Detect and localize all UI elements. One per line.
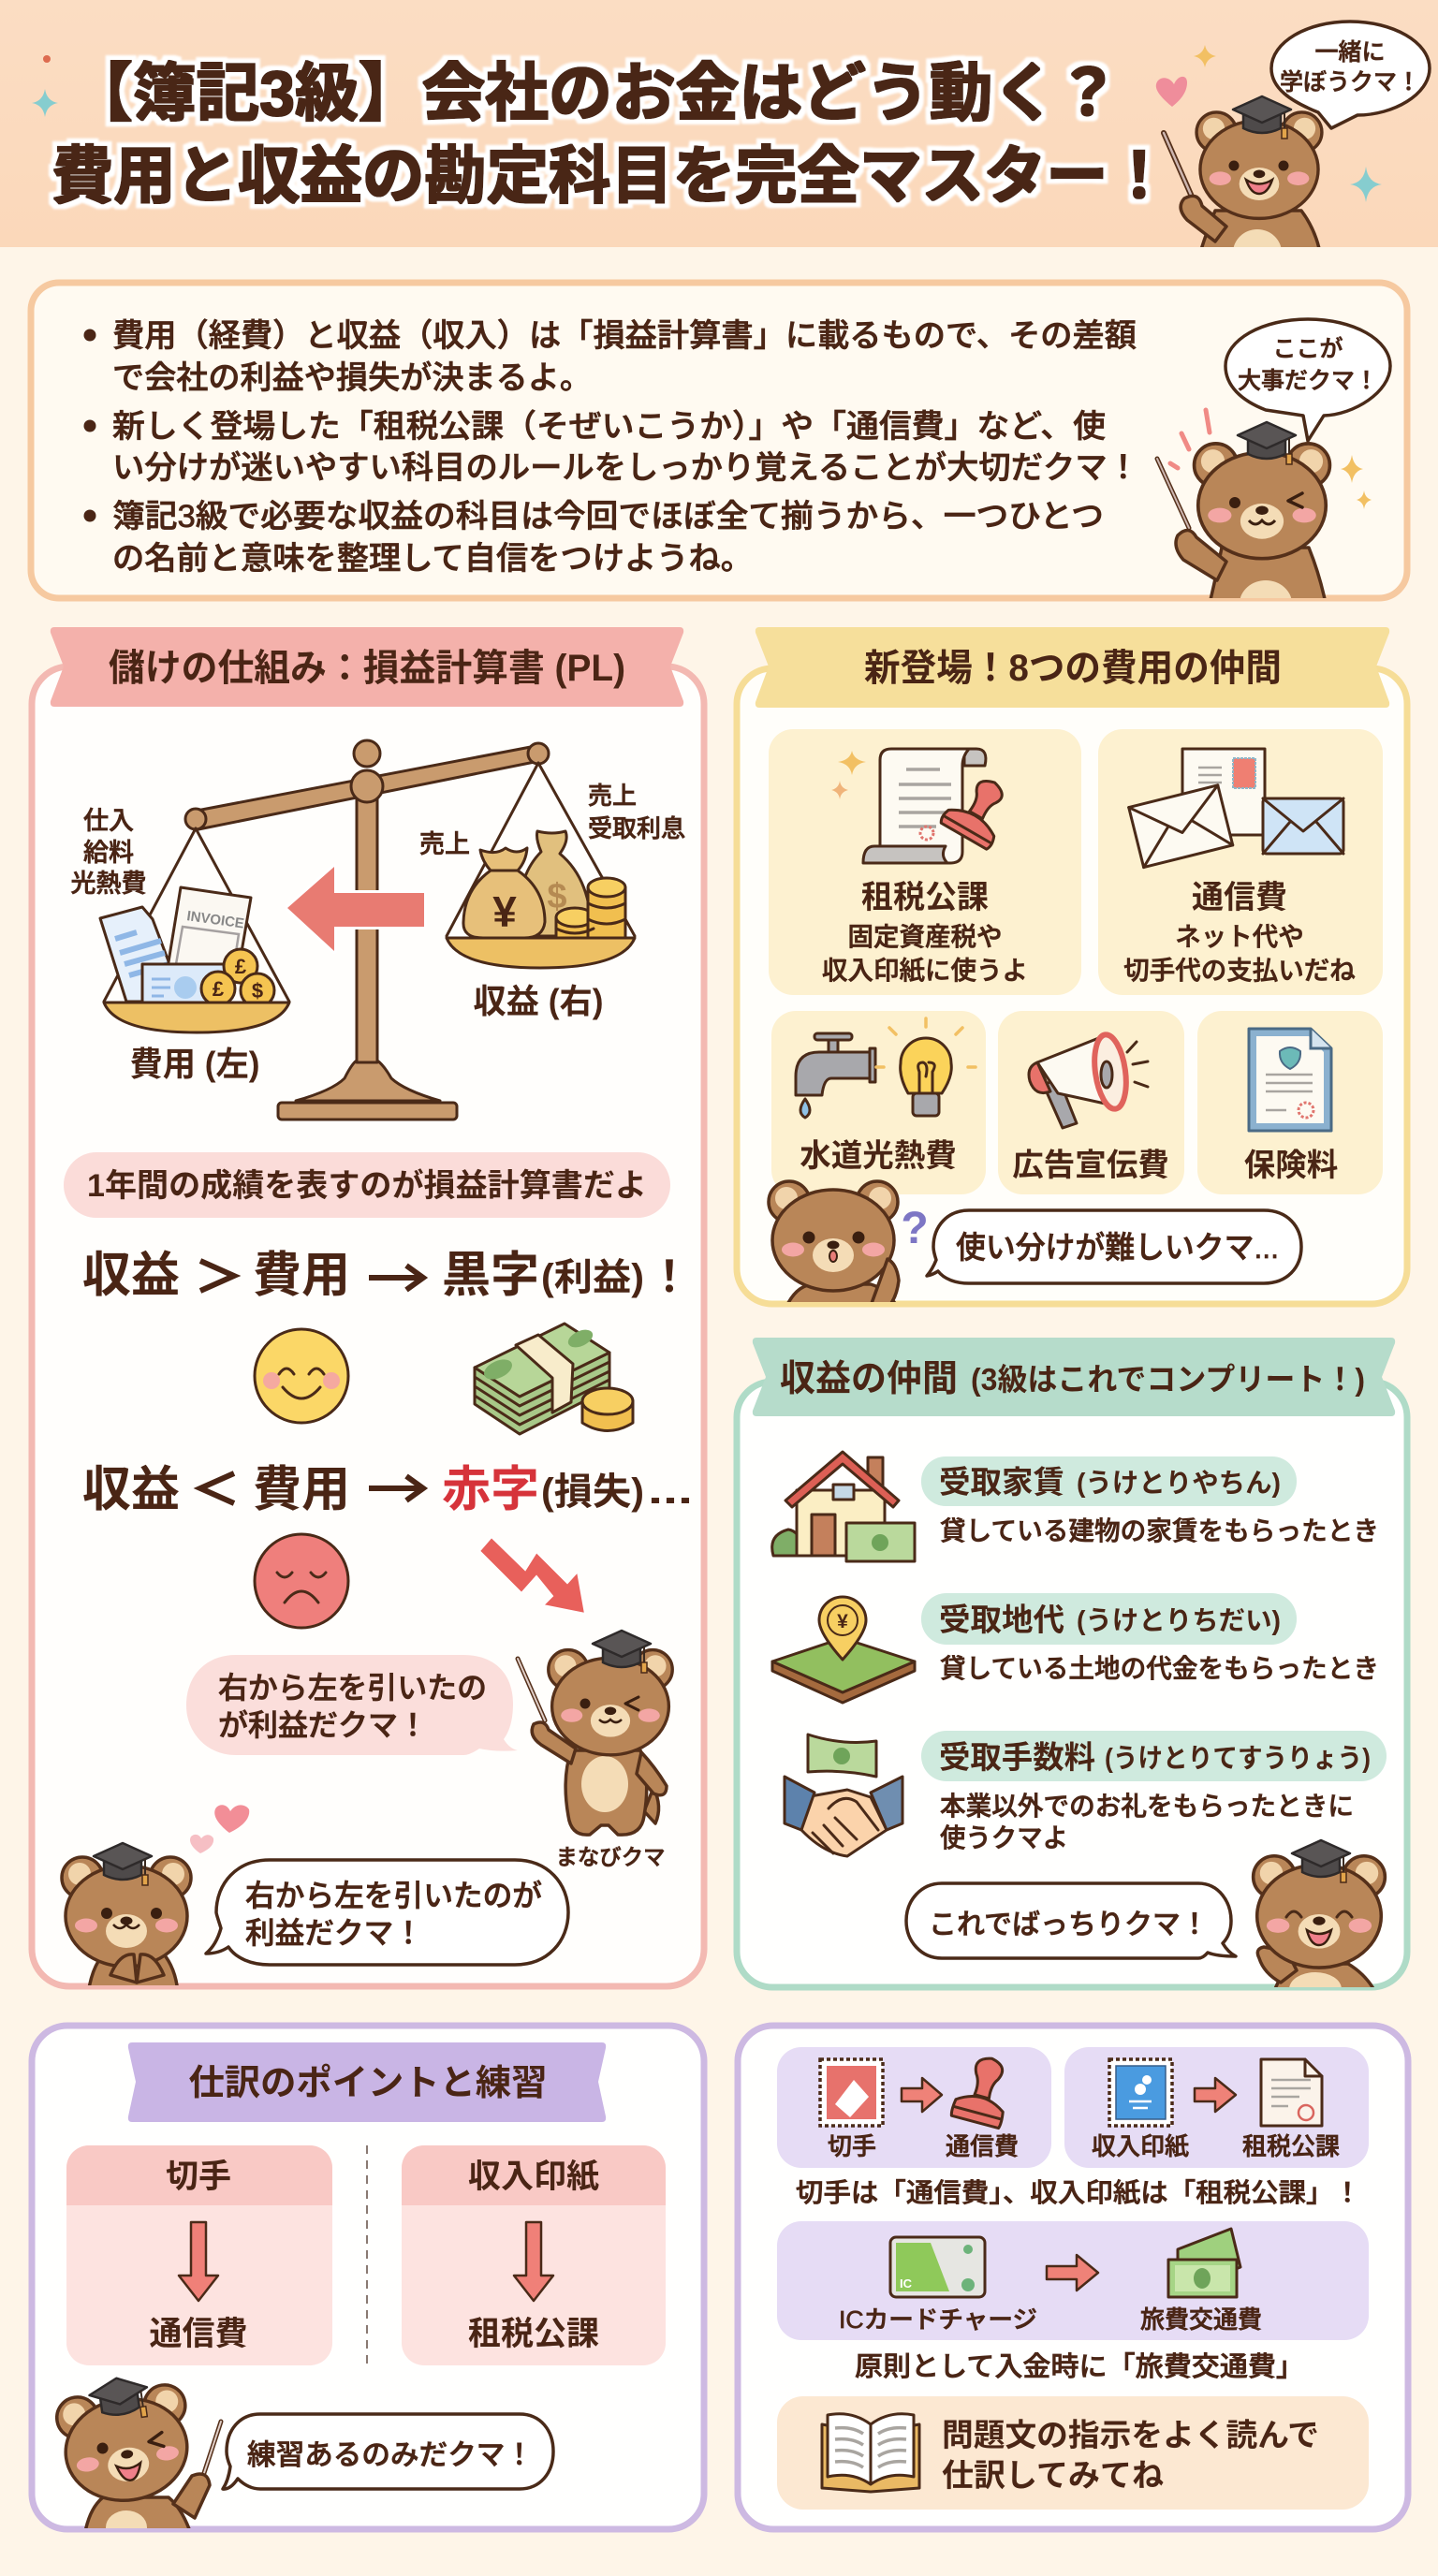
panel: revenue items bbox=[737, 1338, 1407, 2006]
icon: expense documents and coins: $ bbox=[252, 979, 263, 1003]
card: revenue stamps: 収入印紙 bbox=[468, 2159, 599, 2195]
formula: profit bbox=[82, 1249, 691, 1303]
ribbon heading bbox=[51, 627, 683, 707]
item: land rent received bbox=[772, 1593, 1379, 1703]
item: rent received: (うけとりやちん) bbox=[1077, 1469, 1281, 1499]
formula: loss bbox=[82, 1463, 693, 1517]
card: utilities bbox=[771, 1011, 986, 1194]
card: revenue stamps bbox=[402, 2145, 666, 2365]
icon: banknotes bbox=[1168, 2229, 1240, 2297]
icon: handshake with bill bbox=[785, 1734, 902, 1856]
card: IC card to travel bbox=[777, 2221, 1369, 2340]
icon: hand stamp bbox=[950, 2052, 1017, 2129]
item: commission received: (うけとりてすうりょう) bbox=[1105, 1744, 1371, 1774]
scale labels: 仕入 bbox=[83, 807, 134, 835]
pill: one-year results: 1年間の成績を表すのが損益計算書だよ bbox=[87, 1167, 647, 1204]
speech bubble: practice bbox=[223, 2414, 553, 2489]
arrow: falling zigzag bbox=[479, 1537, 585, 1614]
speech bubble: important bbox=[1225, 319, 1390, 441]
scale labels: 売上 bbox=[588, 782, 637, 810]
icon: money bags and coins bbox=[463, 831, 625, 938]
speech bubble: important: ここが bbox=[1272, 336, 1343, 362]
ribbon heading: 仕訳のポイントと練習 bbox=[189, 2064, 547, 2103]
icon: land plot with pin bbox=[772, 1597, 915, 1703]
card: advertising: 広告宣伝費 bbox=[1012, 1149, 1169, 1183]
icon: money bags and coins: $ bbox=[547, 877, 567, 916]
arrow down bbox=[514, 2222, 553, 2301]
icon: land plot with pin: ¥ bbox=[837, 1611, 848, 1632]
arrow right bbox=[902, 2078, 942, 2112]
decoration: sparkles and heart bbox=[1156, 45, 1382, 202]
card: taxes and dues: 固定資産税や bbox=[848, 922, 1002, 951]
speech bubble: profit note pink: 右から左を引いたの bbox=[218, 1671, 487, 1705]
card: taxes and dues: 租税公課 bbox=[861, 880, 989, 915]
text: stamp rule: 切手は「通信費」、収入印紙は「租税公課」！ bbox=[796, 2178, 1361, 2207]
pill: one-year results bbox=[64, 1152, 670, 1218]
text: IC rule: 原則として入金時に「旅費交通費」 bbox=[855, 2351, 1304, 2382]
bullet list: 新しく登場した「租税公課（そぜいこうか）」や「通信費」など、使 bbox=[112, 409, 1106, 445]
icon: expense documents and coins: £ bbox=[235, 955, 247, 978]
icon: question mark: ? bbox=[901, 1204, 929, 1253]
decoration: hearts bbox=[190, 1805, 249, 1853]
card: advertising bbox=[998, 1011, 1184, 1194]
icon: megaphone bbox=[1029, 1032, 1148, 1128]
callout: read the question: 仕訳してみてね bbox=[942, 2458, 1164, 2494]
speech bubble: together: 学ぼうクマ！ bbox=[1280, 69, 1420, 95]
scale labels: 光熱費 bbox=[71, 870, 146, 898]
formula: profit: 費用 bbox=[253, 1249, 350, 1303]
card: revenue stamps: 租税公課 bbox=[468, 2316, 599, 2352]
card: communication: 通信費 bbox=[1192, 880, 1287, 915]
panel: summary bullets bbox=[31, 283, 1407, 627]
icon: scroll and stamp bbox=[831, 749, 1019, 863]
ribbon heading: 新登場！8つの費用の仲間 bbox=[864, 648, 1282, 689]
panel: eight expense items bbox=[737, 627, 1407, 1310]
formula: loss: 費用 bbox=[253, 1463, 350, 1517]
card: IC card to travel: 旅費交通費 bbox=[1140, 2305, 1262, 2334]
ribbon heading: 収益の仲間 bbox=[780, 1359, 958, 1399]
icon: faucet and bulb bbox=[796, 1018, 976, 1118]
item: rent received bbox=[772, 1452, 1379, 1561]
icon: tax document bbox=[1261, 2059, 1322, 2126]
speech bubble: profit note white: 利益だクマ！ bbox=[245, 1916, 423, 1950]
icon: sad face bbox=[255, 1534, 348, 1628]
card: revenue stamp to taxes: 租税公課 bbox=[1242, 2132, 1340, 2160]
ribbon heading: (3級はこれでコンプリート！) bbox=[971, 1362, 1365, 1397]
header band bbox=[0, 0, 1438, 247]
formula: profit: 収益 bbox=[82, 1249, 180, 1303]
card: communication: 切手代の支払いだね bbox=[1123, 956, 1356, 985]
bullet list: で会社の利益や損失が決まるよ。 bbox=[112, 360, 592, 396]
card: IC card to travel: ICカードチャージ bbox=[839, 2305, 1037, 2334]
icon: money bags and coins: ¥ bbox=[492, 887, 517, 936]
card: insurance bbox=[1197, 1011, 1383, 1194]
card: communication: ネット代や bbox=[1175, 922, 1304, 951]
title: 費用と収益の勘定科目を完全マスター！ bbox=[51, 141, 1170, 212]
title bbox=[51, 58, 1170, 212]
card: stamp to communication bbox=[777, 2047, 1051, 2168]
icon: IC card: IC bbox=[900, 2276, 913, 2291]
bullet list: 費用（経費）と収益（収入）は「損益計算書」に載るもので、その差額 bbox=[112, 318, 1137, 354]
mascot: hands-together bear bbox=[62, 1843, 191, 1994]
formula: loss: (損失) bbox=[541, 1471, 644, 1513]
right pan bbox=[447, 938, 635, 968]
panel: examples bbox=[738, 2026, 1408, 2529]
bullet list: の名前と意味を整理して自信をつけようね。 bbox=[112, 541, 753, 577]
icon: money stack and coins bbox=[475, 1324, 633, 1434]
icon: house with bill bbox=[772, 1452, 915, 1561]
panel: journal points and practice bbox=[32, 2026, 704, 2544]
left pan bbox=[104, 1003, 289, 1032]
card: stamps: 切手 bbox=[166, 2159, 231, 2195]
speech bubble: profit note white: 右から左を引いたのが bbox=[245, 1879, 542, 1912]
speech bubble: perfect: これでばっちりクマ！ bbox=[929, 1910, 1209, 1940]
item: commission received: 受取手数料 bbox=[939, 1741, 1095, 1776]
label: manabi bear: まなびクマ bbox=[556, 1845, 665, 1869]
mascot: confused bear bbox=[769, 1181, 899, 1310]
mascot: header bear bbox=[1161, 95, 1324, 247]
speech bubble: profit note white bbox=[206, 1860, 568, 1965]
card: stamps: 通信費 bbox=[149, 2316, 248, 2352]
card: stamp to communication: 通信費 bbox=[946, 2132, 1019, 2160]
bullet list: い分けが迷いやすい科目のルールをしっかり覚えることが大切だクマ！ bbox=[112, 450, 1139, 486]
card: stamps bbox=[66, 2145, 332, 2365]
ribbon heading bbox=[756, 627, 1389, 708]
scale labels bbox=[71, 782, 685, 1083]
scale labels: 収益 (右) bbox=[474, 982, 603, 1020]
decoration: top-left dot and sparkle bbox=[32, 55, 58, 117]
scale labels: 受取利息 bbox=[588, 814, 685, 842]
decoration: alert marks and sparkles bbox=[1170, 410, 1372, 509]
speech bubble: together bbox=[1271, 22, 1430, 128]
formula: loss: ... bbox=[648, 1471, 693, 1512]
icon: expense documents and coins bbox=[100, 887, 274, 1007]
mascot: happy bear waving bbox=[1254, 1840, 1385, 2006]
arrow right bbox=[1195, 2078, 1236, 2112]
arrow right bbox=[1047, 2255, 1098, 2291]
item: land rent received: 受取地代 bbox=[939, 1603, 1064, 1638]
card: utilities: 水道光熱費 bbox=[800, 1139, 957, 1174]
icon: postage stamp bbox=[820, 2059, 883, 2126]
scale labels: 給料 bbox=[83, 839, 134, 867]
formula: loss: 収益 bbox=[82, 1463, 180, 1517]
icon: envelopes bbox=[1129, 749, 1343, 868]
item: commission received: 使うクマよ bbox=[940, 1823, 1068, 1852]
item: land rent received: (うけとりちだい) bbox=[1077, 1606, 1281, 1636]
item: rent received: 貸している建物の家賃をもらったとき bbox=[940, 1516, 1379, 1545]
callout: read the question bbox=[777, 2396, 1369, 2510]
speech bubble: hard to tell apart bbox=[927, 1210, 1301, 1283]
callout: read the question: 問題文の指示をよく読んで bbox=[942, 2418, 1319, 2453]
speech bubble: perfect bbox=[906, 1883, 1236, 1958]
icon: open book bbox=[822, 2414, 919, 2492]
formula: profit: ！ bbox=[648, 1252, 691, 1301]
scale labels: 費用 (左) bbox=[129, 1045, 260, 1083]
arrow down bbox=[179, 2222, 218, 2301]
speech bubble: profit note pink: が利益だクマ！ bbox=[218, 1708, 428, 1742]
item: land rent received: 貸している土地の代金をもらったとき bbox=[940, 1654, 1379, 1683]
card: taxes and dues: 収入印紙に使うよ bbox=[822, 956, 1028, 985]
speech bubble: important: 大事だクマ！ bbox=[1238, 368, 1378, 394]
icon: insurance document bbox=[1249, 1029, 1331, 1131]
card: stamp to communication: 切手 bbox=[828, 2132, 876, 2160]
icon: revenue stamp bbox=[1109, 2059, 1172, 2126]
speech bubble: hard to tell apart: 使い分けが難しいクマ... bbox=[956, 1230, 1279, 1265]
card: revenue stamp to taxes bbox=[1064, 2047, 1369, 2168]
speech bubble: practice: 練習あるのみだクマ！ bbox=[247, 2439, 534, 2471]
item: commission received bbox=[785, 1731, 1387, 1856]
icon: smiling face bbox=[255, 1329, 348, 1423]
icon: IC card bbox=[890, 2237, 985, 2297]
mascot: winking bear with pointer bbox=[55, 2378, 223, 2528]
formula: loss: 赤字 bbox=[442, 1463, 539, 1517]
ribbon heading bbox=[128, 2042, 606, 2122]
card: communication bbox=[1098, 729, 1383, 995]
ribbon heading: 儲けの仕組み：損益計算書 (PL) bbox=[109, 648, 625, 689]
scale labels: 売上 bbox=[419, 830, 470, 858]
bullet list: 簿記3級で必要な収益の科目は今回でほぼ全て揃うから、一つひとつ bbox=[112, 499, 1104, 534]
title: 【簿記3級】会社のお金はどう動く？ bbox=[69, 58, 1120, 129]
balance scale bbox=[100, 740, 635, 1120]
icon: expense documents and coins: INVOICE bbox=[185, 908, 245, 932]
formula: profit: (利益) bbox=[541, 1257, 644, 1298]
mascot: winking bear with pointer bbox=[1155, 421, 1331, 598]
speech bubble: profit note pink bbox=[186, 1655, 518, 1755]
panel: profit mechanism (PL) bbox=[32, 627, 704, 1994]
item: rent received: 受取家賃 bbox=[939, 1466, 1064, 1500]
mascot: manabi bear full body bbox=[518, 1631, 672, 1835]
icon: expense documents and coins: £ bbox=[213, 977, 225, 1001]
formula: profit: 黒字 bbox=[442, 1249, 539, 1303]
card: taxes and dues bbox=[769, 729, 1081, 995]
arrow: balance tilts left bbox=[287, 867, 424, 951]
item: commission received: 本業以外でのお礼をもらったときに bbox=[940, 1792, 1354, 1821]
ribbon heading bbox=[753, 1338, 1395, 1416]
card: revenue stamp to taxes: 収入印紙 bbox=[1092, 2132, 1189, 2160]
speech bubble: together: 一緒に bbox=[1314, 39, 1386, 66]
bullet list bbox=[84, 318, 1139, 577]
card: insurance: 保険料 bbox=[1244, 1149, 1338, 1183]
